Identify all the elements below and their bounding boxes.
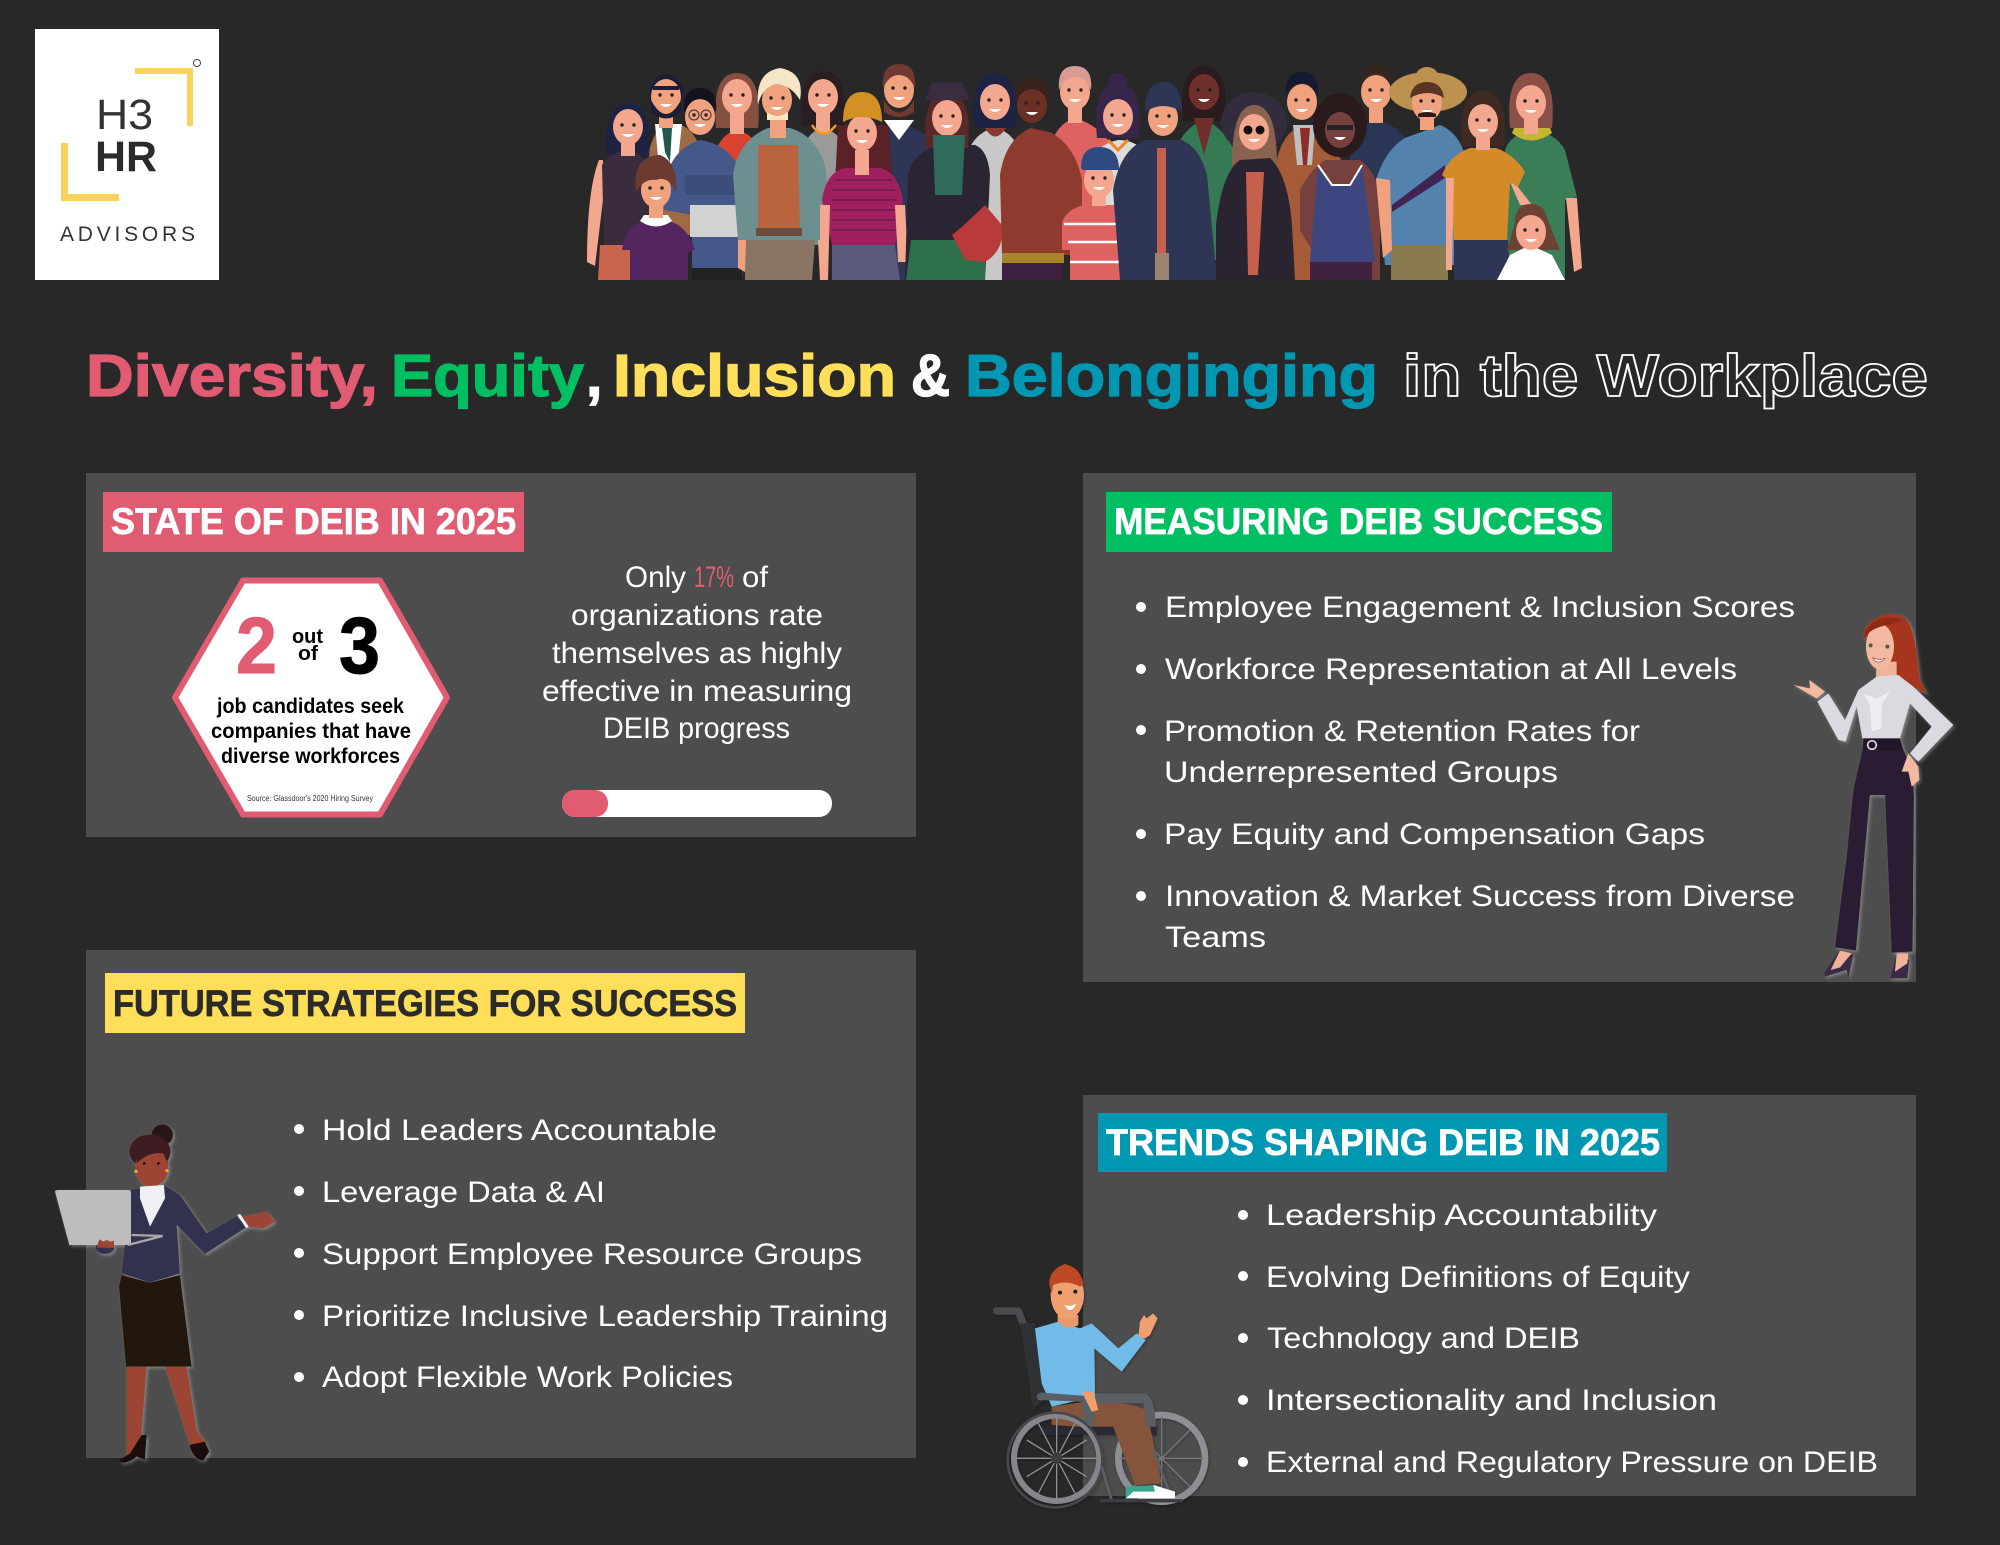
bullet list: success measures: Employee Engagement & Inclusion Scores: [1165, 591, 1795, 624]
heading: trends shaping DEIB: TRENDS SHAPING DEIB IN 2025: [1106, 1122, 1660, 1163]
title word: Diversity: Diversity,: [86, 343, 378, 409]
text block: only 17 percent: Only: [625, 561, 686, 594]
heading: trends shaping DEIB: [1098, 1113, 1667, 1172]
bullet list: trends: Leadership Accountability: [1266, 1199, 1657, 1232]
bullet list: trends: [1238, 1199, 1878, 1479]
callout: 2 out of 3 hexagon: 3: [339, 601, 380, 690]
heading: future strategies: [105, 973, 745, 1033]
bullet list: trends: Evolving Definitions of Equity: [1266, 1261, 1690, 1294]
bullet list: success measures: Underrepresented Groups: [1164, 756, 1558, 789]
title outlined text: in the Workplace: in the Workplace: [1403, 343, 1928, 409]
bullet list: success measures: Promotion & Retention Rates for: [1164, 715, 1640, 748]
callout: 2 out of 3 hexagon: Source: Glassdoor's 2020 Hiring Survey: [247, 794, 373, 803]
back row: man with glasses in navy sweater: [870, 64, 950, 280]
middle row: woman with hat, sunglasses and black jacket: [1216, 92, 1295, 280]
bullet list: success measures: Teams: [1165, 921, 1266, 954]
bullet list: strategies: Hold Leaders Accountable: [322, 1114, 717, 1147]
back row: woman with long brown hair: [712, 73, 768, 195]
heading: measuring DEIB success: MEASURING DEIB SUCCESS: [1114, 501, 1603, 542]
illustration: man in wheelchair waving: [997, 1264, 1205, 1507]
text block: only 17 percent: of: [742, 561, 769, 594]
text block: only 17 percent: 17%: [694, 561, 734, 594]
middle row: woman with hat and green scarf: [905, 82, 1002, 280]
logo: H3 HR Advisors: HR: [95, 133, 157, 181]
title word: Belonginging: Belonginging: [965, 343, 1378, 409]
bullet list: strategies: Prioritize Inclusive Leadership Training: [322, 1300, 888, 1333]
middle row: woman with bun: [1090, 73, 1150, 235]
back row: woman in green shirt: [1505, 73, 1582, 280]
title: [86, 343, 1928, 409]
callout: 2 out of 3 hexagon: [175, 580, 447, 814]
title word: Equity: Equity: [391, 343, 584, 409]
front row: boy with cap in red striped shirt: [1062, 147, 1135, 280]
logo: H3 HR Advisors: [35, 29, 219, 280]
front row: woman with orange beanie and magenta top: [820, 92, 908, 280]
bullet list: strategies: [294, 1114, 888, 1394]
panel: future strategies for success: [86, 950, 916, 1458]
text block: only 17 percent: [542, 561, 852, 745]
text block: only 17 percent: themselves as highly: [552, 637, 842, 670]
heading: state of DEIB: [103, 492, 524, 552]
bullet list: trends: Technology and DEIB: [1267, 1322, 1580, 1355]
illustration: woman with red hair presenting: [1793, 614, 1953, 978]
back row: dark skinned woman in green: [1170, 66, 1242, 260]
back row: woman with necklace: [798, 71, 852, 225]
text block: only 17 percent: DEIB progress: [603, 712, 790, 745]
callout: 2 out of 3 hexagon: out: [292, 626, 323, 648]
bullet list: strategies: Leverage Data & AI: [322, 1176, 605, 1209]
title word: Inclusion: Inclusion: [613, 343, 896, 409]
callout: 2 out of 3 hexagon: diverse workforces: [221, 745, 400, 768]
bullet list: strategies: Adopt Flexible Work Policies: [322, 1361, 733, 1394]
heading: state of DEIB: STATE OF DEIB IN 2025: [111, 501, 516, 542]
bullet list: success measures: Pay Equity and Compensation Gaps: [1164, 818, 1705, 851]
middle row: man in navy beanie and bomber jacket: [1113, 82, 1217, 280]
back row: man with pink hair: [1045, 66, 1118, 220]
middle row: man in brown suit: [1275, 72, 1342, 280]
front row: boy in purple shirt: [622, 155, 695, 280]
panel: state of DEIB in 2025: [86, 473, 916, 837]
middle row: man in red-brown jacket: [1000, 78, 1082, 280]
logo: H3 HR Advisors: H3: [96, 91, 153, 139]
progress bar: 17 percent: [562, 790, 832, 817]
middle row: man with glasses in blue shirt: [664, 88, 746, 280]
bullet list: success measures: Workforce Representation at All Levels: [1165, 653, 1737, 686]
title ampersand: &: [911, 343, 950, 409]
middle row: dark skinned woman in navy tank: [1300, 93, 1380, 280]
middle row: woman in tank top: [587, 103, 650, 280]
back row: woman with navy hair: [962, 73, 1026, 280]
front row: girl in white shirt: [1497, 204, 1565, 280]
middle row: older man in plaid shirt: [733, 68, 830, 280]
middle row: man in straw hat and blue shirt: [1376, 67, 1467, 280]
panel: trends shaping DEIB in 2025: [1083, 1095, 1916, 1496]
callout: 2 out of 3 hexagon: of: [298, 643, 318, 665]
illustration: diverse crowd of people: [587, 64, 1582, 280]
bullet list: success measures: Innovation & Market Success from Diverse: [1165, 880, 1795, 913]
heading: future strategies: FUTURE STRATEGIES FOR SUCCESS: [113, 983, 737, 1024]
callout: 2 out of 3 hexagon: job candidates seek: [216, 695, 404, 718]
illustration: woman with laptop: [55, 1124, 275, 1463]
bullet list: success measures: [1136, 591, 1795, 954]
title comma: ,: [586, 343, 602, 409]
heading: measuring DEIB success: [1106, 492, 1612, 552]
callout: 2 out of 3 hexagon: companies that have: [211, 720, 411, 743]
text block: only 17 percent: organizations rate: [571, 599, 823, 632]
bullet list: strategies: Support Employee Resource Groups: [322, 1238, 862, 1271]
back row: man with tie: [646, 74, 706, 235]
back row: man in navy jacket: [1345, 64, 1414, 215]
middle row: woman in orange tee: [1442, 91, 1532, 280]
callout: 2 out of 3 hexagon: 2: [236, 601, 277, 690]
text block: only 17 percent: effective in measuring: [542, 675, 852, 708]
panel: measuring DEIB success: [1083, 473, 1916, 982]
bullet list: trends: External and Regulatory Pressure on DEIB: [1266, 1446, 1878, 1479]
bullet list: trends: Intersectionality and Inclusion: [1266, 1384, 1717, 1417]
logo: H3 HR Advisors: ADVISORS: [60, 223, 195, 246]
